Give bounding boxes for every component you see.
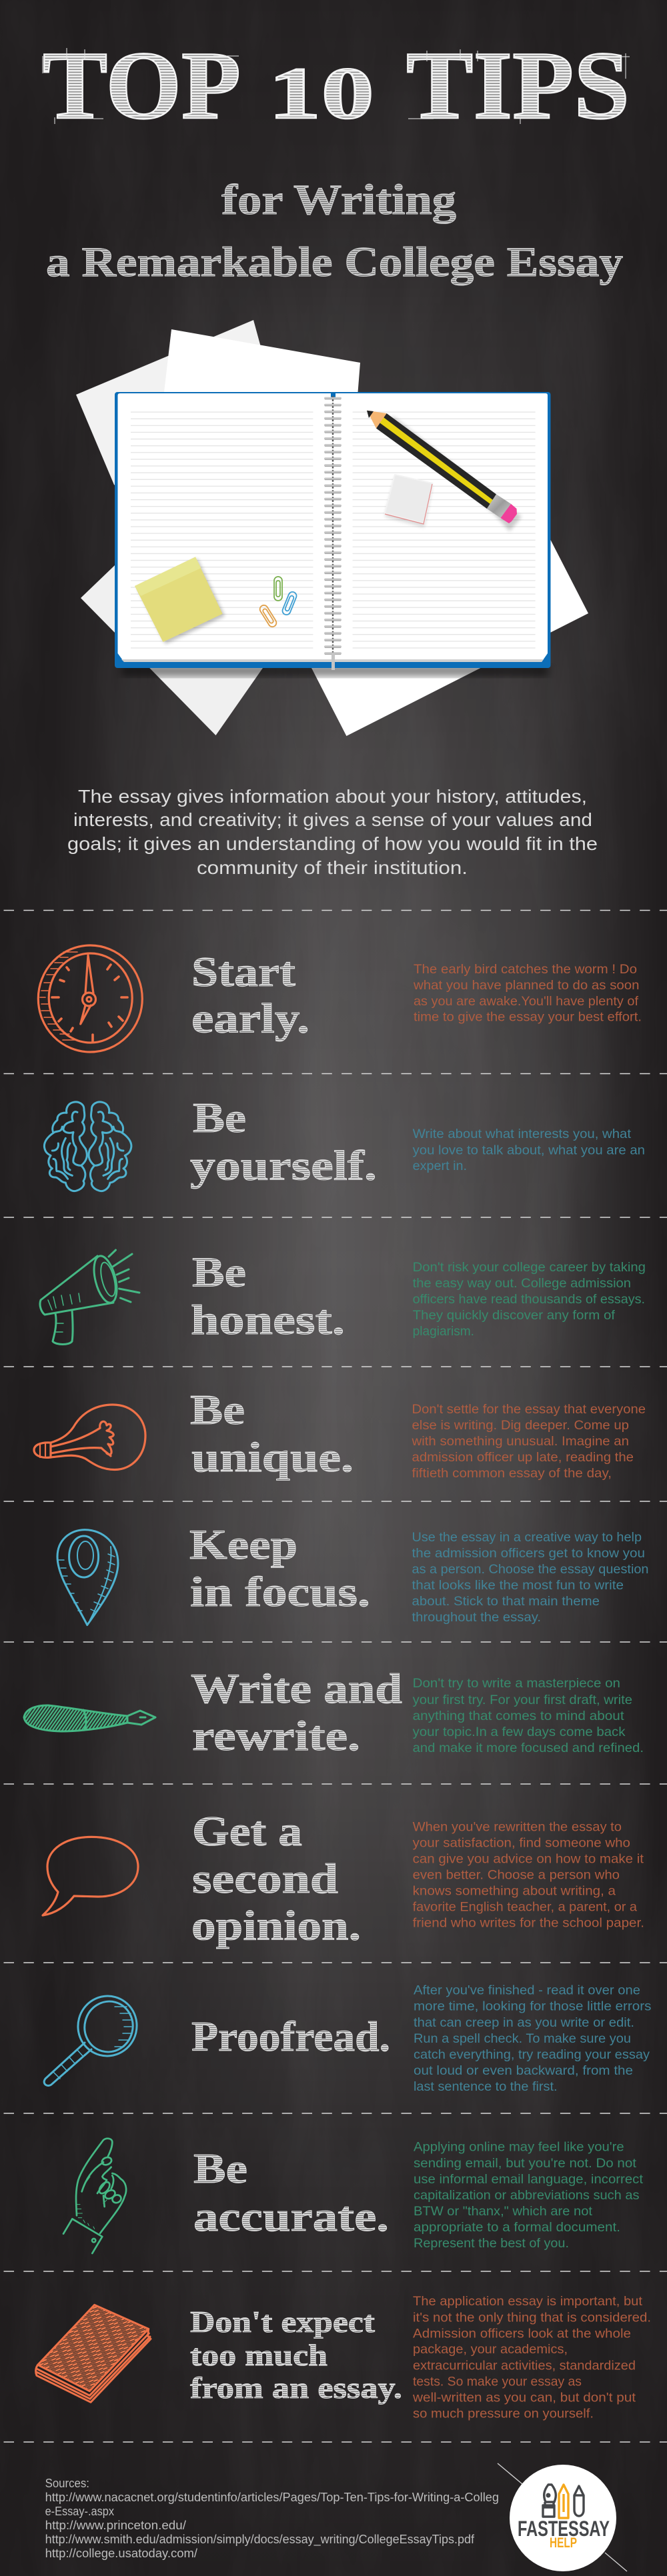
heading: rewrite. — [192, 1712, 360, 1759]
body text: that looks like the most fun to write — [412, 1578, 624, 1593]
body text: When you've rewritten the essay to — [413, 1820, 622, 1835]
tip 8: proofread — [44, 1983, 652, 2094]
body text: what you have planned to do as soon — [413, 978, 639, 993]
body text: as a person. Choose the essay question — [412, 1562, 648, 1577]
body text — [413, 1260, 646, 1339]
heading: Start — [191, 948, 296, 995]
body text: capitalization or abbreviations such as — [414, 2188, 640, 2203]
body text: last sentence to the first. — [414, 2079, 558, 2094]
body text: your first try. For your first draft, write — [413, 1693, 632, 1707]
icon: clock — [38, 945, 142, 1052]
tip 7: get a second opinion — [43, 1807, 644, 1949]
heading — [189, 1521, 370, 1615]
intro paragraph: community of their institution. — [197, 857, 468, 878]
body text: plagiarism. — [413, 1324, 474, 1339]
intro paragraph — [67, 786, 598, 878]
body text — [413, 1127, 645, 1173]
body text: favorite English teacher, a parent, or a — [413, 1900, 637, 1915]
sources — [45, 2477, 499, 2560]
heading — [190, 2305, 402, 2405]
notebook cover — [115, 392, 551, 668]
icon: light bulb — [34, 1405, 145, 1469]
heading: opinion. — [191, 1901, 361, 1949]
body text: BTW or "thanx," which are not — [414, 2204, 593, 2219]
heading — [191, 1665, 402, 1759]
tip 3: be honest — [40, 1248, 646, 1344]
body text: knows something about writing, a — [413, 1884, 616, 1899]
body text: After you've finished - read it over one — [414, 1983, 640, 1998]
heading — [191, 1807, 361, 1949]
heading: second — [192, 1855, 338, 1902]
logo: FastEssay Help: HELP — [550, 2535, 577, 2551]
tip 4: be unique — [34, 1386, 646, 1481]
sources: e-Essay-.aspx — [45, 2505, 114, 2518]
subtitle: for Writing — [221, 176, 456, 224]
icon: pen nib and pencils — [543, 2485, 584, 2518]
body text: appropriate to a formal document. — [414, 2220, 620, 2235]
heading — [191, 948, 309, 1041]
body text — [413, 962, 642, 1024]
heading: early. — [191, 995, 309, 1041]
logo: FastEssay Help — [498, 2463, 627, 2571]
body text: so much pressure on yourself. — [413, 2406, 594, 2421]
heading: yourself. — [190, 1141, 377, 1189]
body text — [412, 1530, 648, 1625]
sources: http://www.nacacnet.org/studentinfo/articles/Pages/Top-Ten-Tips-for-Writing-a-Colleg — [45, 2491, 499, 2504]
body text: else is writing. Dig deeper. Come up — [412, 1418, 629, 1433]
body text: the easy way out. College admission — [413, 1276, 631, 1291]
heading — [190, 1386, 354, 1481]
icon: book — [36, 2305, 151, 2402]
heading: in focus. — [190, 1568, 370, 1615]
heading: Keep — [189, 1521, 297, 1568]
icon: magnifying glass — [44, 1989, 143, 2085]
body text: use informal email language, incorrect — [414, 2172, 644, 2187]
title: 10 — [268, 53, 374, 135]
body text: Run a spell check. To make sure you — [414, 2031, 631, 2046]
body text: it's not the only thing that is considered. — [413, 2310, 651, 2325]
body text: They quickly discover any form of — [413, 1308, 616, 1323]
pencil — [367, 411, 522, 531]
body text — [413, 1676, 644, 1755]
body text — [411, 1402, 646, 1481]
body text: more time, looking for those little errors — [414, 1999, 652, 2014]
heading — [190, 1094, 377, 1189]
notebook illustration with loose paper — [76, 320, 588, 736]
body text: Don't risk your college career by taking — [413, 1260, 646, 1275]
sources: Sources: — [45, 2477, 89, 2490]
sources: http://college.usatoday.com/ — [45, 2547, 197, 2560]
heading: unique. — [191, 1433, 354, 1481]
body text: out loud or even backward, from the — [414, 2063, 633, 2078]
tip 2: be yourself — [44, 1094, 645, 1191]
body text: The early bird catches the worm ! Do — [414, 962, 637, 977]
icon: fountain pen — [24, 1705, 155, 1731]
heading — [191, 1248, 345, 1343]
body text: time to give the essay your best effort. — [414, 1009, 642, 1024]
paper clips — [258, 577, 297, 628]
body text: Don't try to write a masterpiece on — [413, 1676, 620, 1691]
body text: anything that comes to mind about — [413, 1709, 624, 1723]
tip 9: be accurate — [63, 2139, 644, 2253]
body text: admission officer up late, reading the — [412, 1450, 634, 1465]
intro paragraph: The essay gives information about your history, attitudes, — [78, 786, 587, 807]
body text: you love to talk about, what you are an — [413, 1143, 645, 1157]
icon: speech bubble — [43, 1837, 138, 1915]
tip 1: start early — [38, 945, 642, 1052]
heading: Get a — [192, 1807, 302, 1855]
body text: The application essay is important, but — [413, 2294, 643, 2309]
heading: Proofread. — [191, 2013, 390, 2060]
heading: Be — [193, 1094, 246, 1141]
loose sheets of paper — [76, 320, 588, 736]
intro paragraph: goals; it gives an understanding of how you would fit in the — [67, 833, 598, 854]
body text: and make it more focused and refined. — [413, 1741, 644, 1755]
body text: that can creep in as you write or edit. — [414, 2015, 634, 2030]
subtitle — [46, 176, 623, 285]
body text: Don't settle for the essay that everyone — [412, 1402, 646, 1417]
body text: Use the essay in a creative way to help — [412, 1530, 642, 1545]
subtitle: a Remarkable College Essay — [46, 238, 623, 285]
title: TIPS — [406, 31, 630, 139]
title: TOP — [43, 31, 241, 139]
tip 6: write and rewrite — [24, 1665, 644, 1759]
body text — [412, 2294, 651, 2421]
spiral binding — [324, 395, 342, 670]
body text: your topic.In a few days come back — [413, 1725, 626, 1739]
eraser — [385, 475, 432, 527]
body text: friend who writes for the school paper. — [413, 1916, 644, 1931]
body text: about. Stick to that main theme — [412, 1594, 600, 1609]
sticky note — [135, 557, 225, 644]
tip 5: keep in focus — [57, 1521, 648, 1625]
heading: honest. — [191, 1296, 345, 1343]
heading: Don't expect — [190, 2305, 376, 2339]
body text: Represent the best of you. — [414, 2236, 569, 2251]
icon: brain — [44, 1102, 131, 1191]
body text: well-written as you can, but don't put — [412, 2391, 636, 2405]
body text: tests. So make your essay as — [413, 2375, 582, 2389]
heading: from an essay. — [190, 2371, 402, 2405]
logo wordmark: FASTESSAY — [518, 2517, 610, 2541]
icon: megaphone — [40, 1250, 139, 1344]
heading: Write and — [191, 1665, 402, 1712]
body text — [413, 1820, 644, 1931]
tip 10: don't expect too much — [36, 2294, 651, 2421]
heading: Be — [190, 1386, 245, 1433]
body text: sending email, but you're not. Do not — [414, 2156, 637, 2171]
title — [43, 31, 630, 139]
body text: as you are awake.You'll have plenty of — [414, 994, 639, 1009]
body text — [414, 1983, 652, 2094]
body text: the admission officers get to know you — [412, 1546, 645, 1561]
body text: officers have read thousands of essays. — [413, 1292, 645, 1307]
body text: Admission officers look at the whole — [413, 2327, 631, 2341]
body text — [414, 2140, 644, 2251]
sources: http://www.smith.edu/admission/simply/docs/essay_writing/CollegeEssayTips.pdf — [45, 2533, 475, 2547]
heading: Be — [193, 2145, 247, 2192]
body text: expert in. — [413, 1159, 467, 1173]
heading — [193, 2145, 389, 2240]
body text: with something unusual. Imagine an — [411, 1434, 629, 1449]
heading: accurate. — [193, 2193, 389, 2240]
body text: package, your academics, — [413, 2342, 568, 2357]
body text: your satisfaction, find someone who — [413, 1836, 630, 1851]
body text: catch everything, try reading your essay — [414, 2047, 650, 2062]
body text: fiftieth common essay of the day, — [412, 1466, 612, 1481]
sources: http://www.princeton.edu/ — [45, 2519, 186, 2532]
icon: map pin — [57, 1530, 118, 1625]
body text: Applying online may feel like you're — [414, 2140, 624, 2155]
body text: throughout the essay. — [412, 1610, 541, 1625]
body text: Write about what interests you, what — [413, 1127, 632, 1141]
intro paragraph: interests, and creativity; it gives a sense of your values and — [73, 809, 592, 830]
notebook pages — [117, 393, 548, 662]
body text: even better. Choose a person who — [413, 1867, 620, 1882]
icon: pointing hand — [63, 2139, 126, 2253]
heading: too much — [190, 2338, 327, 2372]
body text: can give you advice on how to make it — [413, 1852, 644, 1867]
body text: extracurricular activities, standardized — [413, 2358, 636, 2373]
heading: Be — [192, 1248, 246, 1296]
